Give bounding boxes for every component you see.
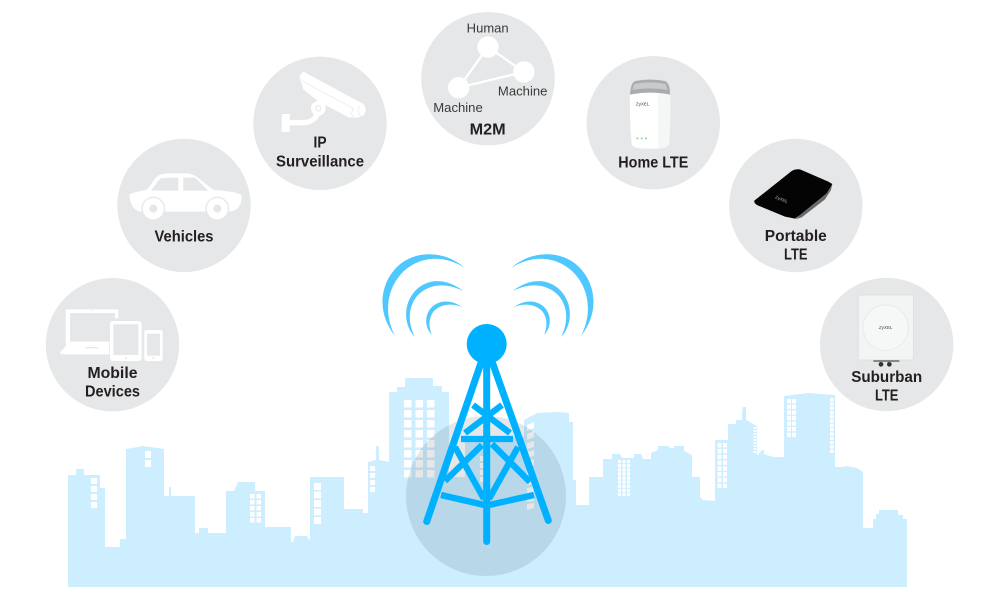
label: Mobile xyxy=(88,365,138,382)
label: human: Human xyxy=(467,21,509,36)
panel: vehicles xyxy=(117,139,251,272)
icon: outdoor router: ZyXEL xyxy=(878,325,893,330)
right-side windows xyxy=(618,398,834,496)
icon: home router: ZyXEL xyxy=(636,101,650,106)
label: machine left: Machine xyxy=(433,100,483,115)
label: machine right: Machine xyxy=(498,84,547,99)
building windows xyxy=(91,451,375,524)
panel: M2M xyxy=(421,12,555,145)
tower-block windows xyxy=(404,400,534,510)
panel: home LTE xyxy=(587,56,720,189)
label: Portable xyxy=(765,228,827,245)
label: LTE xyxy=(784,246,808,263)
panel: portable LTE xyxy=(729,139,862,272)
icon: laptop, tablet and phone xyxy=(60,309,163,361)
antenna tower xyxy=(427,324,548,542)
label: Vehicles xyxy=(154,229,214,246)
label: M2M xyxy=(470,121,506,138)
label: Suburban xyxy=(851,369,922,386)
panel: suburban LTE xyxy=(820,278,953,411)
label: IP xyxy=(314,135,326,152)
icon: network triangle xyxy=(448,36,535,98)
label: Devices xyxy=(85,384,140,401)
icon: security camera xyxy=(282,72,366,132)
radio waves left xyxy=(383,254,465,337)
panel: IP surveillance xyxy=(253,57,387,190)
radio waves right xyxy=(511,254,593,337)
panel: mobile devices xyxy=(46,278,179,411)
label: LTE xyxy=(875,388,898,405)
label: Surveillance xyxy=(276,154,364,171)
icon: car xyxy=(129,173,242,221)
label: Home LTE xyxy=(618,154,688,171)
tower base circle xyxy=(406,416,566,576)
city skyline xyxy=(68,378,907,587)
icon: portable router: ZyXEL xyxy=(774,194,789,204)
